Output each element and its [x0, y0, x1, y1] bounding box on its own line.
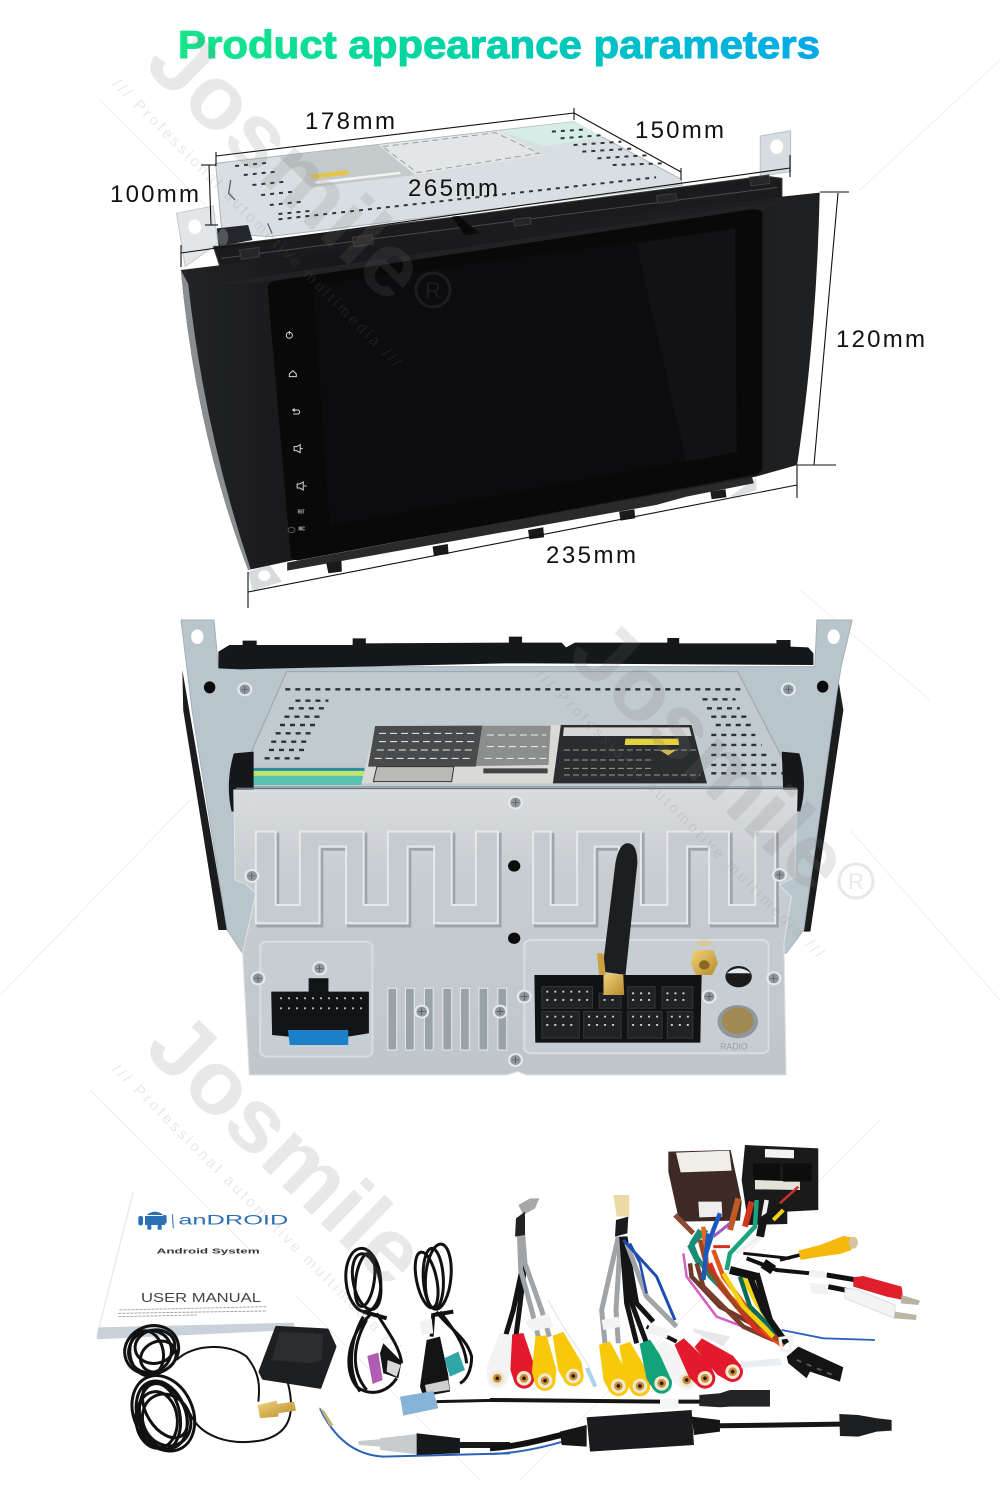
android logotype: anDROID: [178, 1212, 288, 1228]
265mm dimension: [181, 155, 790, 267]
watermark middle: R: [848, 869, 864, 894]
100mm dimension: [201, 165, 218, 225]
watermark top: Josmile: [128, 8, 446, 320]
GPS antenna puck: [260, 1327, 335, 1387]
RCA and power sockets: [717, 966, 758, 1038]
bezel marking MIC: MIC: [298, 526, 306, 532]
plate holes: [508, 860, 666, 966]
dimension label 178mm: 178mm: [305, 108, 395, 135]
178mm dimension: [216, 108, 574, 166]
red audio RCA: [808, 1269, 920, 1305]
USB cable coil left: [343, 1247, 402, 1392]
embossed RADIO marking: RADIO: [720, 1041, 748, 1051]
first RCA lead wires: [503, 1198, 590, 1368]
150mm dimension: [574, 113, 681, 180]
front view of head unit: [177, 122, 820, 591]
wiring harness: [675, 1187, 875, 1347]
accessories: RCA leads, harness, decoder, adapter: [483, 1145, 920, 1454]
235mm dimension: [248, 465, 797, 608]
watermark middle: Josmile: [551, 599, 869, 911]
dimension label 120mm: 120mm: [836, 326, 925, 353]
lower recess panels: [260, 940, 769, 1057]
screws: [237, 682, 796, 1067]
yellow reverse camera RCA: [780, 1236, 858, 1260]
left mounting bracket: [177, 206, 218, 267]
left harness connector: [271, 978, 369, 1045]
white audio RCA: [810, 1283, 917, 1320]
USB socket and purple connector: [367, 1343, 402, 1384]
watermark bottom: Josmile: [128, 993, 446, 1305]
chassis top: [216, 122, 682, 237]
serpentine embossing: [256, 832, 777, 926]
chassis top: [236, 672, 797, 787]
rear view of head unit: [181, 620, 852, 1075]
watermark middle: /// Professional automotive multimedia ///: [532, 667, 828, 962]
HDMI style plug and teal connector: [420, 1318, 465, 1397]
manual subtitle: Android System: [157, 1247, 260, 1256]
side rounded bumps: [229, 752, 804, 812]
colored sticker: [239, 768, 365, 785]
watermark bottom: /// Professional automotive multimedia ///: [109, 1061, 405, 1356]
SMA gold connector: [691, 940, 718, 975]
right mounting bracket: [760, 131, 791, 176]
dimension label 150mm: 150mm: [635, 117, 724, 144]
aerial stub antenna: [597, 843, 637, 995]
dimension label 100mm: 100mm: [110, 181, 199, 208]
black top strip: [218, 637, 813, 669]
watermark top: R: [425, 278, 441, 303]
CAN bus decoder box: [668, 1150, 742, 1222]
blue plug and audio cable: [400, 1391, 510, 1416]
mounting frame: [181, 620, 852, 953]
touch keys: [286, 331, 307, 533]
main harness connector: [780, 1337, 843, 1382]
right connector block: [534, 975, 702, 1043]
second RCA lead wires: [602, 1195, 730, 1347]
vent slots: [388, 988, 507, 1050]
GPS cable coil: [118, 1318, 291, 1461]
dark side edges: [182, 670, 843, 932]
USB cable coil right: [411, 1243, 472, 1383]
first RCA plugs: [483, 1329, 597, 1392]
specification labels: [361, 725, 707, 783]
accessories: manual, GPS antenna, USB cables: [97, 1192, 510, 1461]
second RCA plugs: [593, 1333, 782, 1400]
dimension label 265mm: 265mm: [408, 175, 498, 202]
left side knob: [217, 225, 252, 247]
bezel body: [181, 193, 820, 591]
manual heading: USER MANUAL: [141, 1291, 261, 1305]
android robot icon: [138, 1212, 173, 1230]
watermark top: /// Professional automotive multimedia ///: [109, 76, 405, 371]
black harness adapter box: [742, 1145, 818, 1225]
top black strip: [213, 175, 782, 273]
dimension label 235mm: 235mm: [546, 542, 636, 569]
user manual: [97, 1192, 297, 1339]
aerial amplifier with cable: [490, 1410, 892, 1454]
dimension lines: [181, 108, 849, 608]
glass panel: [268, 209, 762, 560]
LCD screen: [313, 228, 737, 526]
title: Product appearance parameters: [178, 24, 820, 67]
audio jack lead: [490, 1390, 770, 1409]
120mm dimension: [797, 192, 849, 465]
gold SMA plug: [258, 1401, 296, 1418]
radio aerial plug: [319, 1407, 510, 1457]
bezel marking RST: RST: [298, 509, 305, 514]
rear plate: [234, 788, 797, 1075]
